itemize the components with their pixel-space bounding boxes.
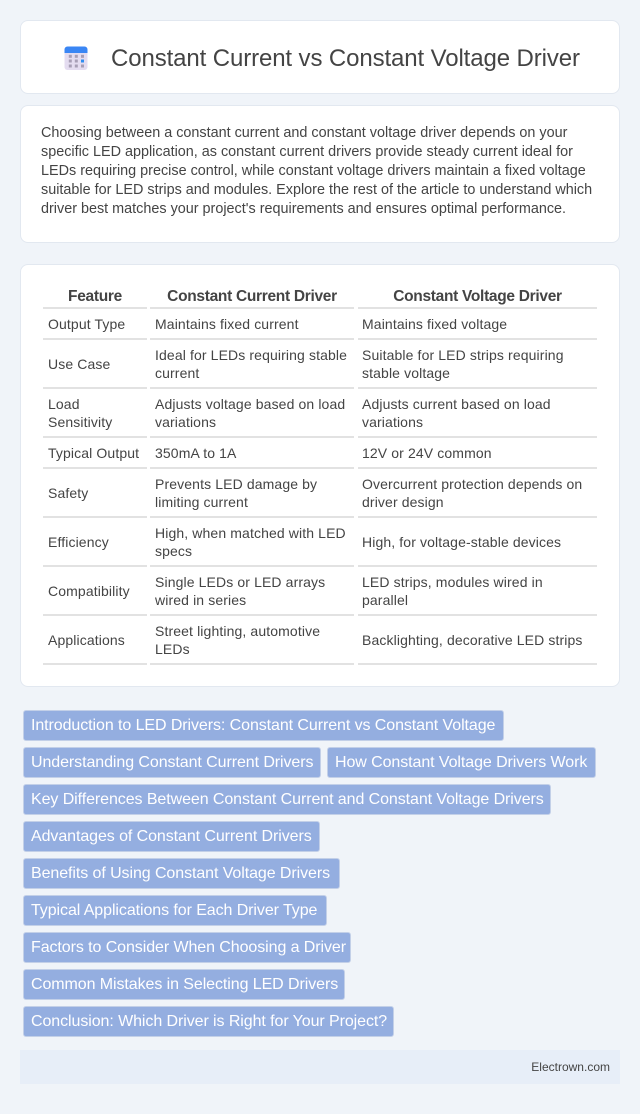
link chip: conclusion [23, 1006, 394, 1037]
link chip: typical applications: Typical Applications for Each Driver Type [31, 902, 317, 919]
table header: Constant Voltage Driver [393, 288, 562, 305]
link chip: factors: Factors to Consider When Choosing a Driver [31, 939, 346, 956]
link chip: factors [23, 932, 351, 963]
table header: Constant Current Driver [167, 288, 337, 305]
row: typical output: 350mA to 1A [155, 445, 236, 461]
link chip: understanding constant current [23, 747, 321, 778]
table header: Feature [68, 288, 122, 305]
row: load sensitivity: Adjusts current based on load [362, 396, 551, 412]
link chip: advantages: Advantages of Constant Current Drivers [31, 828, 312, 845]
link chip: key differences [23, 784, 551, 815]
link chip: how constant voltage works [327, 747, 596, 778]
row: typical output [43, 445, 597, 469]
intro text: driver best matches your project's requirements and ensures optimal performance. [41, 201, 566, 217]
row: safety: driver design [362, 494, 444, 510]
row: safety: Overcurrent protection depends on [362, 476, 582, 492]
link chip: common mistakes: Common Mistakes in Selecting LED Drivers [31, 976, 338, 993]
row: safety [43, 476, 597, 518]
link chip: conclusion: Conclusion: Which Driver is Right for Your Project? [31, 1013, 387, 1030]
link chip: typical applications [23, 895, 327, 926]
link chip: benefits: Benefits of Using Constant Voltage Drivers [31, 865, 330, 882]
row: applications [43, 623, 597, 665]
row: applications: Applications [48, 632, 125, 648]
row: load sensitivity: variations [155, 414, 216, 430]
row: safety: Safety [48, 485, 88, 501]
row: efficiency: Efficiency [48, 534, 109, 550]
panel: comparison table [20, 264, 620, 687]
row: compatibility: LED strips, modules wired in [362, 574, 543, 590]
link chip: advantages [23, 821, 320, 852]
row: load sensitivity: Adjusts voltage based on load [155, 396, 345, 412]
footer [20, 1050, 620, 1084]
panel: intro [20, 105, 620, 243]
row: compatibility: parallel [362, 592, 408, 608]
title: Constant Current vs Constant Voltage Driver [111, 45, 580, 72]
row: use case: Use Case [48, 356, 110, 372]
table header [43, 288, 597, 309]
link chip: benefits [23, 858, 340, 889]
link chip: how constant voltage works: How Constant Voltage Drivers Work [335, 754, 587, 771]
intro text: LEDs requiring precise control, while constant voltage drivers maintain a fixed voltage [41, 163, 586, 179]
row: output type: Maintains fixed voltage [362, 316, 507, 332]
intro text: Choosing between a constant current and constant voltage driver depends on your [41, 125, 567, 141]
row: use case: Ideal for LEDs requiring stable [155, 347, 347, 363]
row: load sensitivity: Load [48, 396, 80, 412]
row: load sensitivity: variations [362, 414, 423, 430]
row: compatibility: wired in series [155, 592, 246, 608]
row: applications: Street lighting, automotive [155, 623, 320, 639]
footer credit: Electrown.com [531, 1060, 610, 1074]
row: applications: LEDs [155, 641, 190, 657]
panel: header [20, 20, 620, 94]
row: efficiency [43, 525, 597, 567]
row: typical output: 12V or 24V common [362, 445, 492, 461]
row: use case: Suitable for LED strips requiring [362, 347, 564, 363]
link chip: key differences: Key Differences Between Constant Current and Constant Voltage Drivers [31, 791, 544, 808]
link chip: understanding constant current: Understanding Constant Current Drivers [31, 754, 313, 771]
row: applications: Backlighting, decorative LED strips [362, 632, 583, 648]
row: efficiency: High, when matched with LED [155, 525, 346, 541]
link chip: introduction [23, 710, 504, 741]
intro text: specific LED application, as constant current drivers provide steady current ideal for [41, 144, 573, 160]
row: output type: Output Type [48, 316, 125, 332]
row: efficiency: High, for voltage-stable devices [362, 534, 561, 550]
icon: calendar grid [64, 46, 88, 70]
row: use case [43, 347, 597, 389]
row: load sensitivity: Sensitivity [48, 414, 112, 430]
row: typical output: Typical Output [48, 445, 139, 461]
row: safety: limiting current [155, 494, 248, 510]
row: efficiency: specs [155, 543, 192, 559]
row: output type: Maintains fixed current [155, 316, 299, 332]
row: use case: current [155, 365, 199, 381]
row: use case: stable voltage [362, 365, 450, 381]
row: load sensitivity [43, 396, 597, 438]
intro text [41, 125, 592, 217]
row: compatibility: Compatibility [48, 583, 130, 599]
row: output type [43, 316, 597, 340]
link chip: common mistakes [23, 969, 345, 1000]
link chip: introduction: Introduction to LED Drivers: Constant Current vs Constant Voltage [31, 717, 495, 734]
row: compatibility [43, 574, 597, 616]
row: safety: Prevents LED damage by [155, 476, 317, 492]
intro text: suitable for LED strips and modules. Explore the rest of the article to understand which [41, 182, 592, 198]
row: compatibility: Single LEDs or LED arrays [155, 574, 325, 590]
